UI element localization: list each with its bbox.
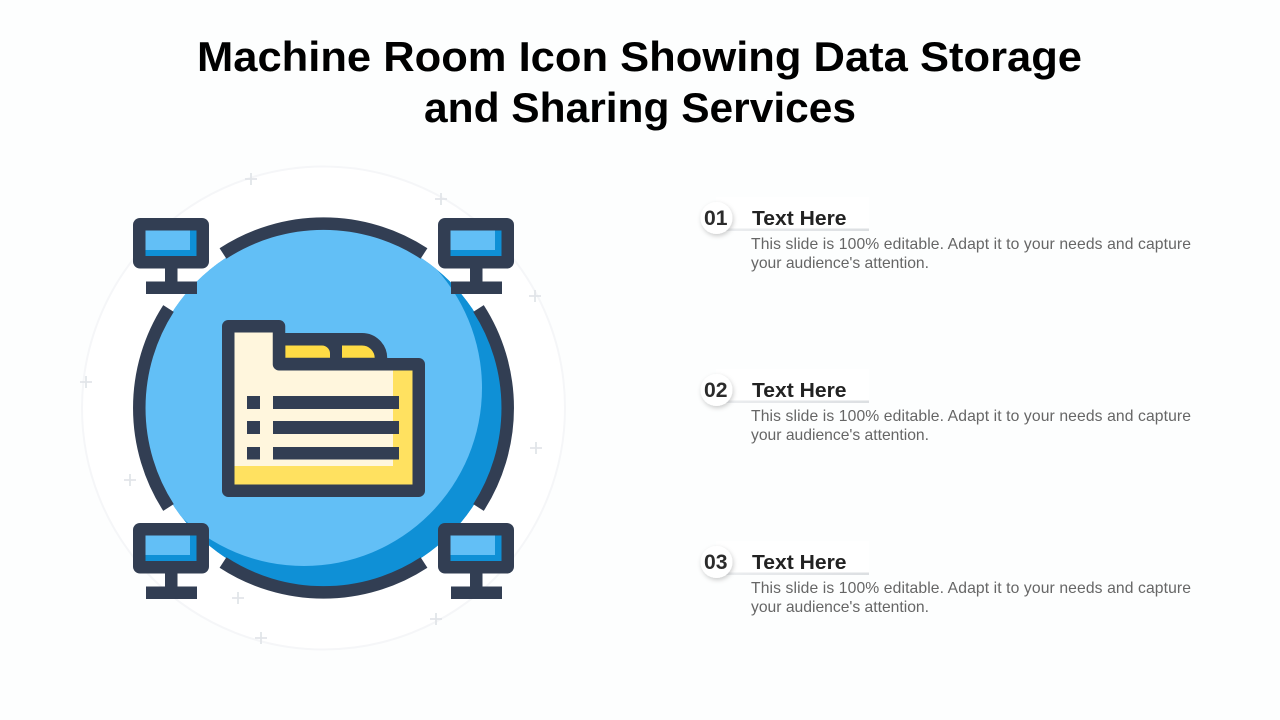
title [197,33,1082,131]
icon illustration: machine room network [80,166,565,650]
title: and Sharing Services [424,84,856,131]
icon: monitor bottom left [133,523,209,599]
item 02: This slide is 100% editable. Adapt it to your needs and capture [751,408,1191,425]
item 03: 03 [704,551,728,574]
outer faint ring [82,166,565,650]
icon: monitor bottom right [438,523,514,599]
item 02 [700,369,1191,444]
item 03: your audience's attention. [751,599,929,616]
icon: monitor top right [438,218,514,294]
item 02: Text Here [752,380,846,402]
item 01: 01 [704,207,728,230]
central blue disc [146,230,502,586]
item 01: Text Here [752,208,846,230]
icon: folder [228,326,419,491]
item 03: This slide is 100% editable. Adapt it to your needs and capture [751,580,1191,597]
title: Machine Room Icon Showing Data Storage [197,33,1082,80]
item 03: Text Here [752,552,846,574]
item 02: your audience's attention. [751,427,929,444]
icon: monitor top left [133,218,209,294]
item 02: 02 [704,379,728,402]
item 03 [700,541,1191,616]
item 01 [700,197,1191,272]
item 01: your audience's attention. [751,255,929,272]
decorative plus marks [80,173,542,644]
segmented dark ring [139,224,508,592]
item 01: This slide is 100% editable. Adapt it to your needs and capture [751,236,1191,253]
